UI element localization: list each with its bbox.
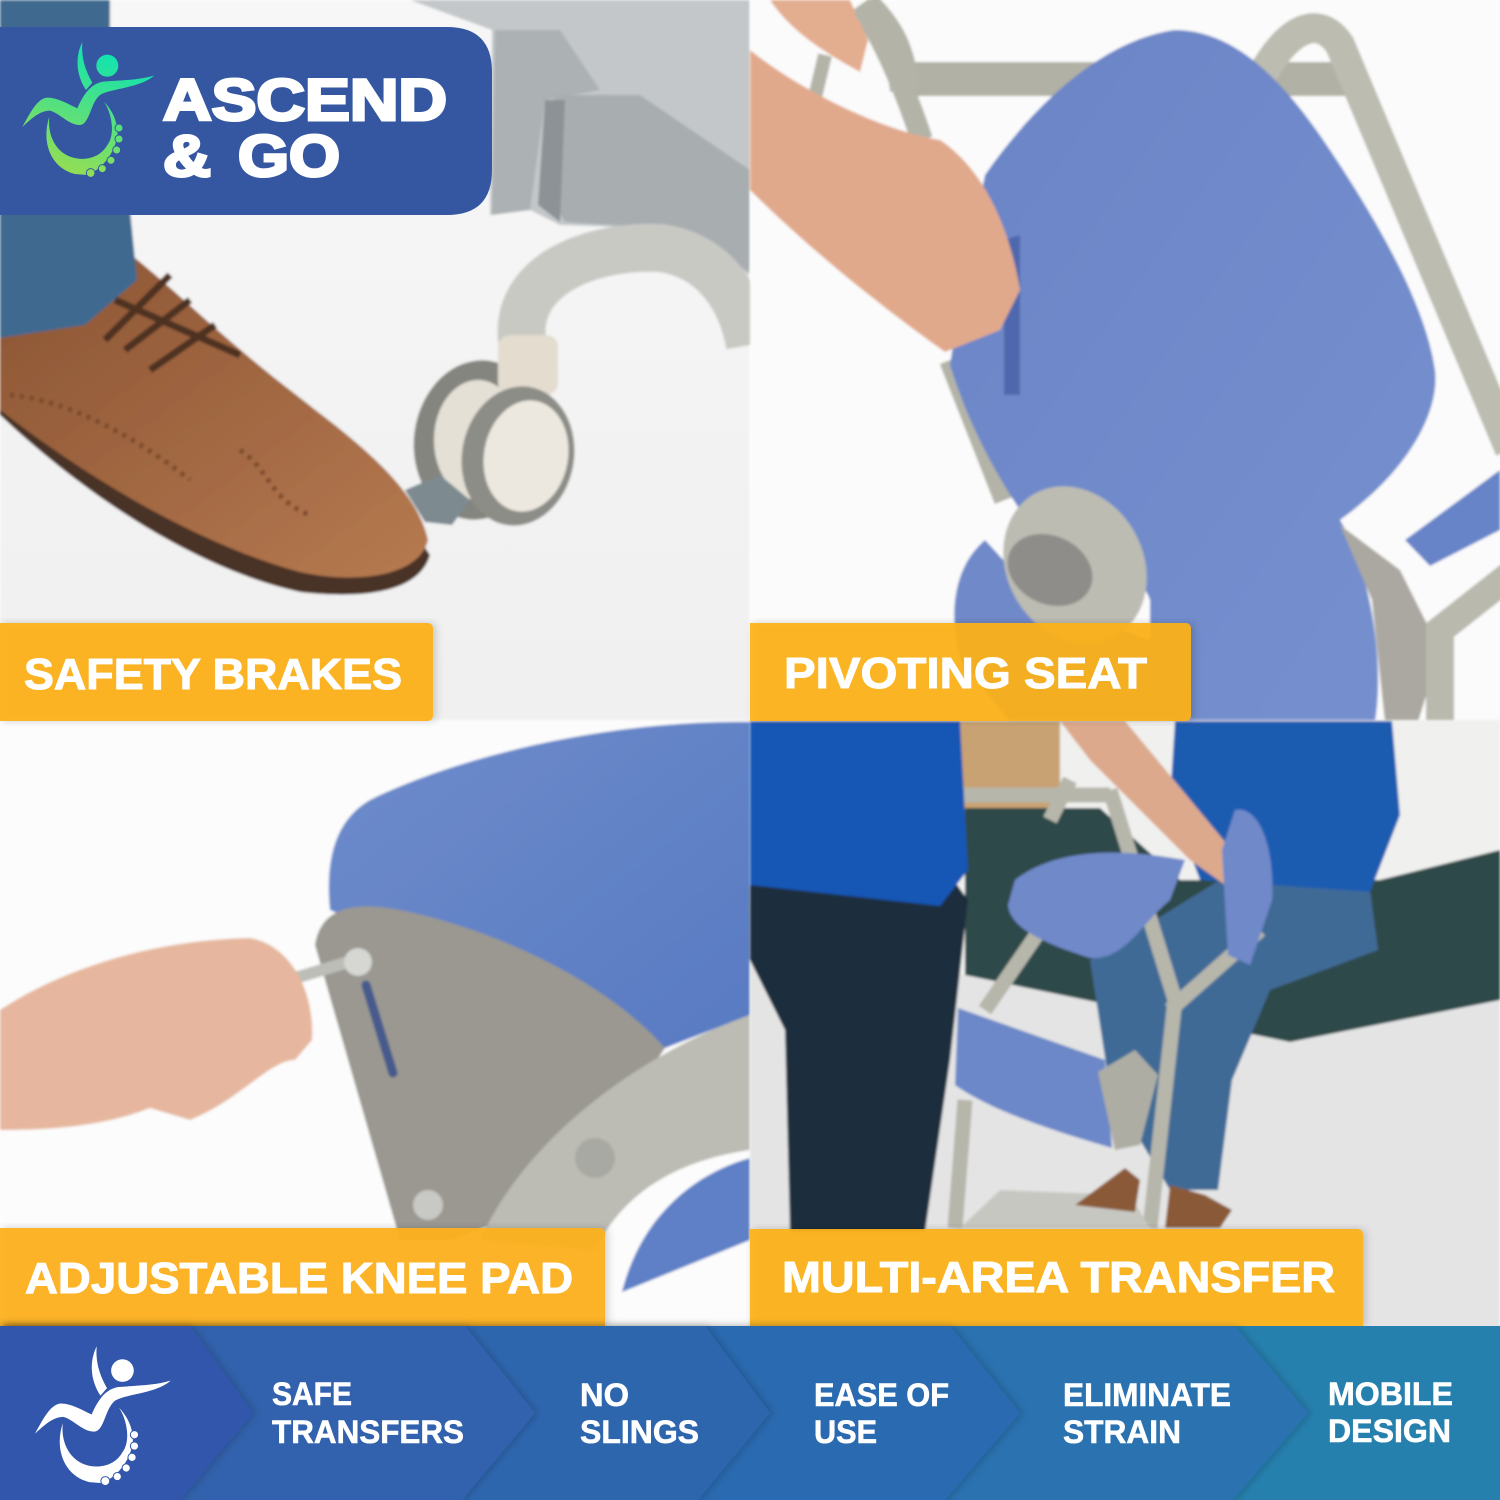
- brand name: ASCEND: [163, 68, 447, 133]
- hand: [0, 938, 312, 1130]
- caster arm: [522, 248, 750, 345]
- benefit: mobile design: [1328, 1376, 1453, 1449]
- wood headboard: [955, 721, 1060, 813]
- chevron 5: [0, 1326, 1308, 1500]
- tube left small: [812, 55, 825, 110]
- brand name second line: &: [163, 124, 211, 189]
- jeans: [0, 210, 137, 338]
- patient shirt: [1170, 721, 1400, 892]
- hand on seat: [750, 50, 1020, 352]
- benefit: eliminate strain: STRAIN: [1063, 1414, 1181, 1450]
- upper hand: [770, 0, 868, 72]
- pin: [282, 960, 355, 982]
- back pad: [1222, 810, 1272, 965]
- bolts: [575, 1138, 615, 1178]
- lower pad: [622, 1158, 750, 1292]
- benefit: ease of use: EASE OF: [814, 1377, 949, 1413]
- laces: [105, 275, 240, 370]
- rear wheel: [403, 352, 553, 528]
- lower right tube: [1440, 575, 1500, 722]
- logo mark: [22, 42, 154, 177]
- label: pivoting seat: PIVOTING SEAT: [784, 649, 1147, 698]
- benefit: no slings: NO: [580, 1377, 629, 1413]
- chevron 4: [0, 1326, 1020, 1500]
- shoe upper: [0, 258, 428, 577]
- machine base: [340, 0, 750, 275]
- pivot seat: [1008, 853, 1185, 958]
- benefit: no slings: SLINGS: [580, 1414, 699, 1450]
- label: pivoting seat: [750, 623, 1191, 721]
- front wheel: [451, 377, 585, 535]
- plate: [315, 906, 665, 1240]
- frame right tube: [1262, 28, 1500, 450]
- mattress: [965, 808, 1500, 1042]
- knee pad: [955, 1008, 1112, 1148]
- benefit: safe transfers: [272, 1376, 464, 1450]
- shoe sole: [0, 380, 430, 595]
- slot: [366, 985, 393, 1073]
- chevron 3: [0, 1326, 770, 1500]
- caregiver jeans: [750, 875, 968, 1232]
- right bracket: [1340, 525, 1440, 722]
- benefit: no slings: [580, 1377, 699, 1450]
- label: adjustable knee pad: [0, 1228, 605, 1326]
- top tube over hand: [865, 5, 905, 90]
- frame left tube: [860, 5, 1005, 500]
- seat pad: [950, 30, 1436, 722]
- brand name second line: GO: [238, 124, 340, 189]
- photo: adjustable knee pad: [0, 720, 750, 1330]
- chevron 2: [0, 1326, 535, 1500]
- benefit: mobile design: DESIGN: [1328, 1413, 1451, 1449]
- caregiver arm: [1060, 721, 1240, 892]
- label: safety brakes: [0, 623, 433, 721]
- seat handle slot: [1004, 235, 1020, 395]
- right pad: [1405, 470, 1500, 566]
- bracket: [1098, 1050, 1158, 1150]
- caster post: [498, 335, 558, 395]
- label: safety brakes: SAFETY BRAKES: [24, 650, 402, 699]
- photo: pivoting seat: [750, 0, 1500, 722]
- shoes: [1075, 1168, 1232, 1228]
- benefit: eliminate strain: [1063, 1377, 1231, 1450]
- benefit: safe transfers: SAFE: [272, 1376, 352, 1412]
- benefits ribbon: [0, 1326, 1500, 1500]
- chevron 1: [0, 1326, 253, 1500]
- patient jeans: [1090, 880, 1378, 1190]
- pivot hub: [975, 460, 1175, 670]
- benefit: mobile design: MOBILE: [1328, 1376, 1453, 1412]
- foot plate: [960, 1190, 1150, 1228]
- benefit: ease of use: USE: [814, 1414, 877, 1450]
- logo panel: [0, 27, 492, 215]
- floor: [750, 960, 1500, 1330]
- white logo mark: [35, 1346, 171, 1485]
- frame bar: [905, 62, 1345, 96]
- caregiver shirt: [750, 721, 968, 906]
- base shadow strip: [538, 100, 565, 222]
- brake pedal: [405, 475, 470, 525]
- brogue pattern: [10, 395, 310, 515]
- label: adjustable knee pad: ADJUSTABLE KNEE PAD: [25, 1254, 573, 1303]
- label: multi-area transfer: [750, 1229, 1363, 1326]
- benefit: safe transfers: TRANSFERS: [272, 1414, 464, 1450]
- benefit: eliminate strain: ELIMINATE: [1063, 1377, 1231, 1413]
- label: multi-area transfer: MULTI-AREA TRANSFER: [782, 1253, 1335, 1302]
- benefit: ease of use: [814, 1377, 949, 1450]
- brand name second line: [163, 124, 340, 189]
- pad: [329, 722, 750, 1050]
- photo: safety brakes: [0, 0, 750, 722]
- frame: [955, 780, 1260, 1228]
- lower left pad: [954, 540, 1150, 722]
- curved tube: [480, 1015, 750, 1250]
- photo: multi-area transfer: [750, 720, 1500, 1330]
